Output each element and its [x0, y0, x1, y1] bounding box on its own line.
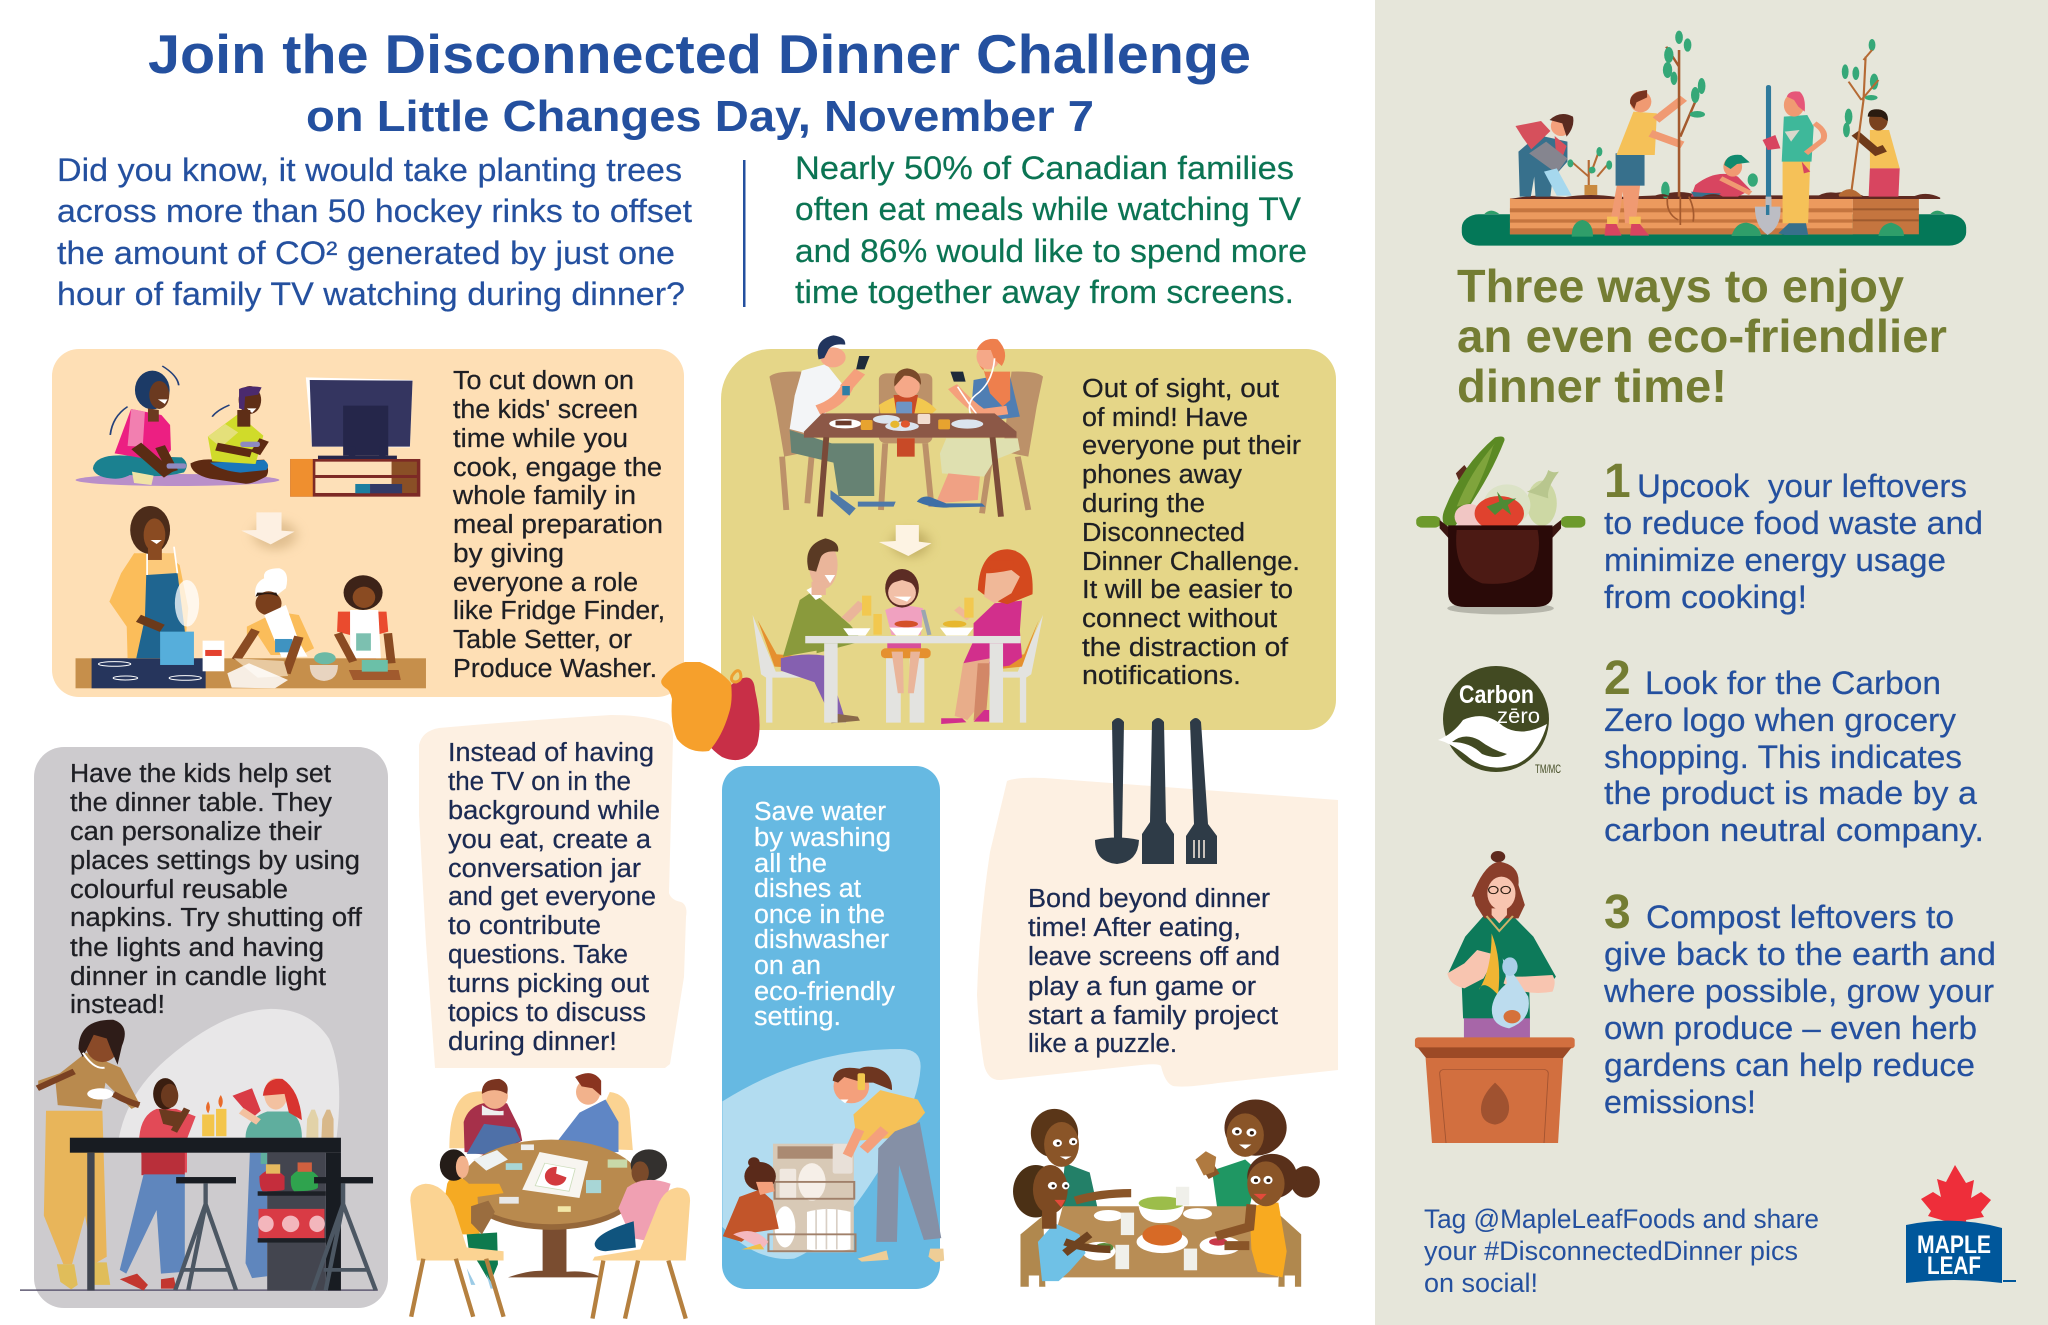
panel: kitchen roles	[52, 349, 684, 697]
text block: phones away: connect without	[1082, 605, 1277, 633]
step 1 text: to reduce food waste and	[1604, 505, 1983, 541]
step 3 text: 3	[1604, 886, 1631, 939]
text block: bond beyond dinner: leave screens off and	[1028, 943, 1280, 971]
text block: kitchen roles: like Fridge Finder,	[453, 597, 665, 625]
step 3 text	[1603, 886, 1996, 1120]
text block: phones away: Dinner Challenge.	[1082, 548, 1300, 576]
illustration: loading the dishwasher	[722, 1049, 944, 1262]
text block: kitchen roles: whole family in	[452, 482, 636, 510]
intro text: family statistics	[795, 150, 1307, 310]
text block: bond beyond dinner: Bond beyond dinner	[1028, 885, 1271, 913]
intro text: family statistics: often eat meals while watching TV	[795, 191, 1302, 227]
text block: save water: Save water	[754, 798, 887, 826]
text block: kitchen roles	[452, 367, 665, 683]
text block: bond beyond dinner: start a family project	[1028, 1002, 1278, 1030]
text block: set the table: napkins. Try shutting off	[70, 904, 363, 932]
logo: Carbon Zero: TM/MC	[1535, 762, 1561, 776]
intro text: family statistics: Nearly 50% of Canadian families	[795, 150, 1294, 186]
logo: Maple Leaf: MAPLE	[1917, 1231, 1991, 1259]
illustration: family eating together	[1013, 1100, 1320, 1287]
logo: Carbon Zero: Carbon	[1459, 681, 1534, 709]
text block: set the table: Have the kids help set	[70, 760, 331, 788]
text block: conversation jar: the TV on in the	[448, 768, 631, 796]
intro text: CO2 fact: Did you know, it would take planting trees	[57, 152, 682, 188]
text block: conversation jar: questions. Take	[448, 941, 628, 969]
step 3 text: Compost leftovers to	[1646, 899, 1954, 935]
social call to action: your #DisconnectedDinner pics	[1424, 1236, 1798, 1266]
social call to action: Tag @MapleLeafFoods and share	[1424, 1204, 1819, 1234]
text block: save water: on an	[754, 952, 821, 980]
text block: kitchen roles: by giving	[453, 540, 564, 568]
step 3 text: own produce – even herb	[1604, 1010, 1977, 1046]
text block: save water: setting.	[754, 1003, 841, 1031]
heading: three ways	[1457, 260, 1947, 412]
text block: phones away: everyone put their	[1082, 432, 1302, 460]
step 2 text: carbon neutral company.	[1604, 812, 1984, 848]
text block: phones away: the distraction of	[1082, 634, 1289, 662]
intro text: CO2 fact: hour of family TV watching during dinner?	[57, 276, 685, 312]
text block: bond beyond dinner: play a fun game or	[1028, 973, 1257, 1001]
illustration: family lighting candles at a counter	[20, 1009, 378, 1291]
text block: conversation jar: conversation jar	[448, 855, 642, 883]
step 1 text: 1	[1604, 455, 1631, 508]
heading: three ways: Three ways to enjoy	[1457, 260, 1904, 312]
intro text: CO2 fact: across more than 50 hockey rinks to offset	[57, 193, 692, 229]
text block: set the table: the lights and having	[70, 934, 324, 962]
text block: kitchen roles: the kids' screen	[453, 396, 638, 424]
intro text: family statistics: time together away from screens.	[795, 274, 1294, 310]
step 2 text: the product is made by a	[1604, 775, 1978, 811]
heading: three ways: an even eco-friendlier	[1457, 310, 1947, 362]
logo: Maple Leaf: LEAF	[1927, 1252, 1981, 1280]
text block: save water	[754, 798, 895, 1031]
panel: bond beyond dinner	[977, 718, 1338, 1087]
logo: Maple Leaf	[1906, 1165, 2016, 1283]
title: Join the Disconnected Dinner Challenge	[148, 23, 1251, 85]
text block: set the table: can personalize their	[70, 818, 323, 846]
text block: save water: all the	[754, 850, 827, 878]
illustration: kids at tv then cooking together	[76, 366, 426, 688]
step 3 text: emissions!	[1604, 1084, 1756, 1120]
step 1 text: Upcook your leftovers	[1637, 468, 1967, 504]
text block: phones away: notifications.	[1082, 662, 1241, 690]
step 1 text	[1604, 455, 1983, 615]
text block: kitchen roles: meal preparation	[453, 511, 663, 539]
icon: oven mitts	[661, 662, 760, 760]
text block: phones away	[1082, 375, 1302, 690]
panel: conversation jar	[419, 715, 686, 1068]
text block: phones away: during the	[1082, 490, 1205, 518]
text block: bond beyond dinner: time! After eating,	[1028, 914, 1241, 942]
logo: Carbon Zero	[1438, 666, 1561, 776]
step 2 text	[1604, 652, 1984, 848]
text block: save water: by washing	[754, 824, 891, 852]
text block: set the table: dinner in candle light	[70, 963, 326, 991]
step 3 text: gardens can help reduce	[1604, 1047, 1975, 1083]
text block: bond beyond dinner: like a puzzle.	[1028, 1030, 1177, 1058]
intro text: family statistics: and 86% would like to spend more	[795, 233, 1307, 269]
text block: phones away: phones away	[1082, 461, 1242, 489]
text block: kitchen roles: To cut down on	[453, 367, 634, 395]
text block: bond beyond dinner	[1028, 885, 1280, 1058]
text block: conversation jar: topics to discuss	[448, 999, 646, 1027]
text block: conversation jar: Instead of having	[448, 739, 654, 767]
text block: conversation jar	[448, 739, 660, 1056]
step 1 text: minimize energy usage	[1604, 542, 1946, 578]
text block: conversation jar: background while	[448, 797, 660, 825]
text block: save water: dishes at	[754, 875, 861, 903]
step 2 text: Look for the Carbon	[1645, 665, 1941, 701]
illustration: family playing a board game	[410, 1073, 690, 1319]
text block: kitchen roles: Produce Washer.	[453, 655, 657, 683]
panel: save water	[722, 766, 944, 1289]
text block: set the table: instead!	[70, 991, 165, 1019]
icon: ladle, spatula and slotted turner	[1095, 718, 1217, 864]
step 2 text: shopping. This indicates	[1604, 739, 1962, 775]
step 2 text: Zero logo when grocery	[1604, 702, 1957, 738]
text block: kitchen roles: everyone a role	[453, 569, 638, 597]
step 2 text: 2	[1604, 652, 1631, 705]
text block: save water: eco-friendly	[754, 978, 895, 1006]
title: on Little Changes Day, November 7	[306, 92, 1094, 141]
intro text: CO2 fact: the amount of CO² generated by just one	[57, 235, 675, 271]
step 3 text: give back to the earth and	[1604, 936, 1996, 972]
text block: save water: once in the	[754, 901, 885, 929]
icon: downward arrow	[241, 512, 295, 544]
text block: set the table: colourful reusable	[70, 876, 288, 904]
illustration: family on phones then talking at table	[753, 335, 1043, 724]
title	[148, 23, 1251, 141]
step 1 text: from cooking!	[1604, 579, 1807, 615]
text block: conversation jar: turns picking out	[448, 970, 649, 998]
text block: conversation jar: you eat, create a	[448, 826, 652, 854]
text block: phones away: Disconnected	[1082, 519, 1245, 547]
logo: Carbon Zero: zēro	[1497, 705, 1540, 728]
text block: phones away: Out of sight, out	[1082, 375, 1279, 403]
heading: three ways: dinner time!	[1457, 360, 1727, 412]
icon: downward arrow	[879, 525, 931, 556]
text block: conversation jar: during dinner!	[448, 1028, 617, 1056]
text block: phones away: of mind! Have	[1082, 404, 1248, 432]
icon: cooking pot with leftovers	[1416, 437, 1585, 614]
step 3 text: where possible, grow your	[1603, 973, 1994, 1009]
sidebar panel background	[1375, 0, 2048, 1325]
text block: save water: dishwasher	[754, 926, 890, 954]
text block: set the table: places settings by using	[70, 847, 360, 875]
illustration: woman composting at a podium	[1415, 851, 1575, 1143]
text block: conversation jar: to contribute	[448, 912, 601, 940]
panel: set the table	[20, 747, 388, 1308]
text block: phones away: It will be easier to	[1082, 576, 1293, 604]
text block: kitchen roles: Table Setter, or	[453, 626, 633, 654]
text block: set the table	[70, 760, 363, 1019]
text block: kitchen roles: cook, engage the	[453, 454, 662, 482]
social call to action	[1424, 1204, 1819, 1298]
illustration: community planting trees in a raised bed	[1462, 31, 1966, 246]
text block: conversation jar: and get everyone	[448, 883, 656, 911]
text block: kitchen roles: time while you	[453, 425, 628, 453]
panel: phones away	[721, 335, 1336, 730]
text block: set the table: the dinner table. They	[70, 789, 332, 817]
intro text: CO2 fact	[57, 152, 692, 312]
social call to action: on social!	[1424, 1268, 1538, 1298]
